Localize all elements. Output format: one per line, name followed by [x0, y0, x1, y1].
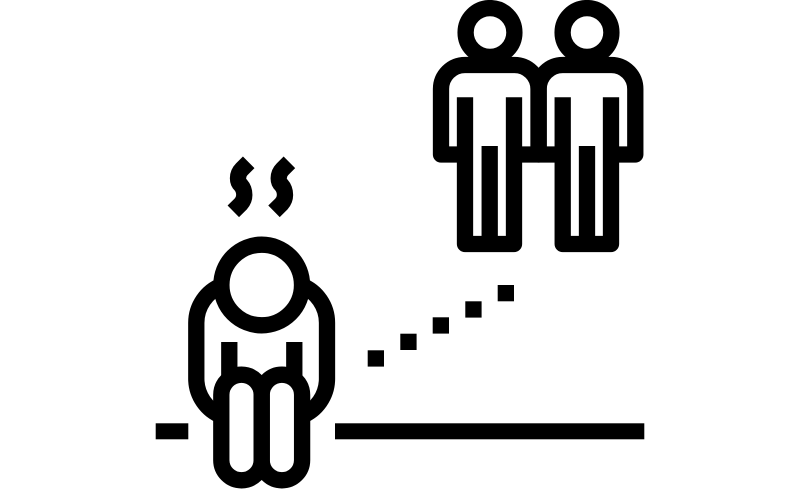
ground line: left segment [156, 423, 188, 439]
icon: left standing person [441, 8, 538, 244]
icon: right stress squiggle [274, 162, 289, 211]
icon: right standing person [539, 8, 635, 244]
ground line: right segment [335, 423, 644, 439]
icon: left stress squiggle [233, 162, 249, 211]
dotted line between sitting person and pair [368, 285, 514, 367]
icon: sitting person with head down [196, 245, 327, 480]
